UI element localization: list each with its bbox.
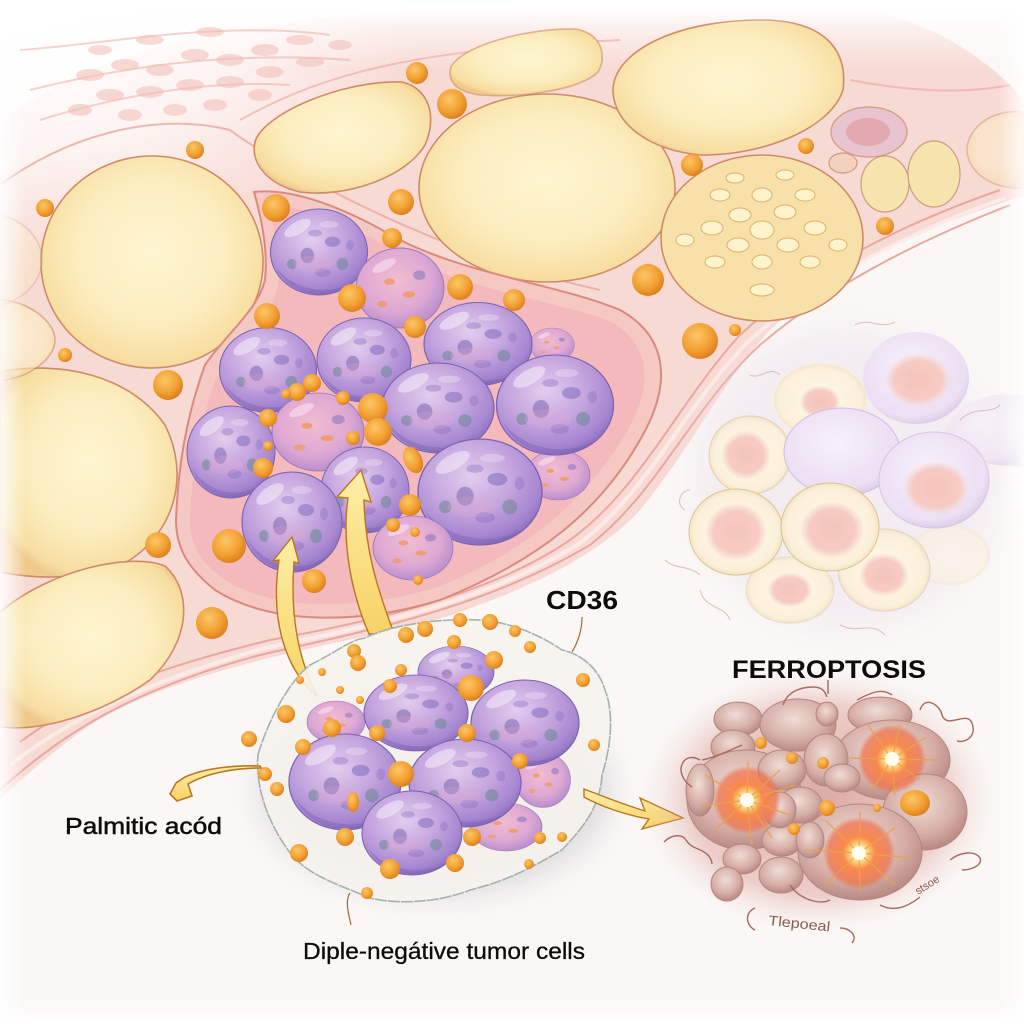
label: tumor cells: Diple-negátive tumor cells [303,938,585,964]
burst: bottom [805,812,910,892]
arrow: up into left tumor cell [273,537,318,697]
garbled caption below burst: Tlepoeal [768,912,831,934]
tumor cell cluster [187,209,614,580]
burst: top right [850,725,935,795]
arrow: to ferroptosis [584,789,683,829]
panel: ferroptosis cluster [640,668,996,943]
necrotic cell lumps [686,697,967,901]
label: Palmitic acid: Palmitic acód [65,813,222,839]
leader line [347,893,351,925]
ferroptosis glow [640,668,996,932]
background pink cells [516,752,570,808]
textured fat cell [661,155,863,321]
panel: lobule with tumor cells [176,191,661,618]
burst: left [700,762,796,845]
white highlights on fibres [10,198,1005,765]
top fade [0,0,1024,70]
connective tissue base [0,8,1024,800]
arrow: up into central tumor cell [337,470,392,634]
purple tumor cells [270,209,368,295]
cluster shadow [260,685,610,895]
tissue fibres [0,30,1010,790]
CD36 leader line [572,617,582,652]
top-left fade [0,0,420,260]
cluster membrane [258,620,611,902]
pale wisps [665,322,1000,635]
panel: adipose tissue band [0,0,1024,800]
panel: pale fading cells [665,322,1024,635]
iron droplets [755,737,930,835]
background pink cells [526,450,590,500]
filaments [664,680,980,943]
label: CD36: CD36 [546,585,618,615]
lobule membrane [176,191,661,618]
garbled caption right: stsoe [913,873,942,898]
lipid droplets [241,613,600,899]
purple tumor cells [418,646,494,698]
fat droplets in tissue [36,62,894,639]
fine adipose mesh, top left [68,27,352,121]
fat cells [0,20,1024,728]
pale cell halo [695,330,995,630]
lipid droplets [212,194,525,593]
small cells at right [829,107,960,212]
panel: tumor cell cluster with CD36 [241,613,611,925]
arrow: palmitic acid [170,766,261,801]
lobule inner lining [190,206,644,604]
label: FERROPTOSIS: FERROPTOSIS [732,656,926,684]
